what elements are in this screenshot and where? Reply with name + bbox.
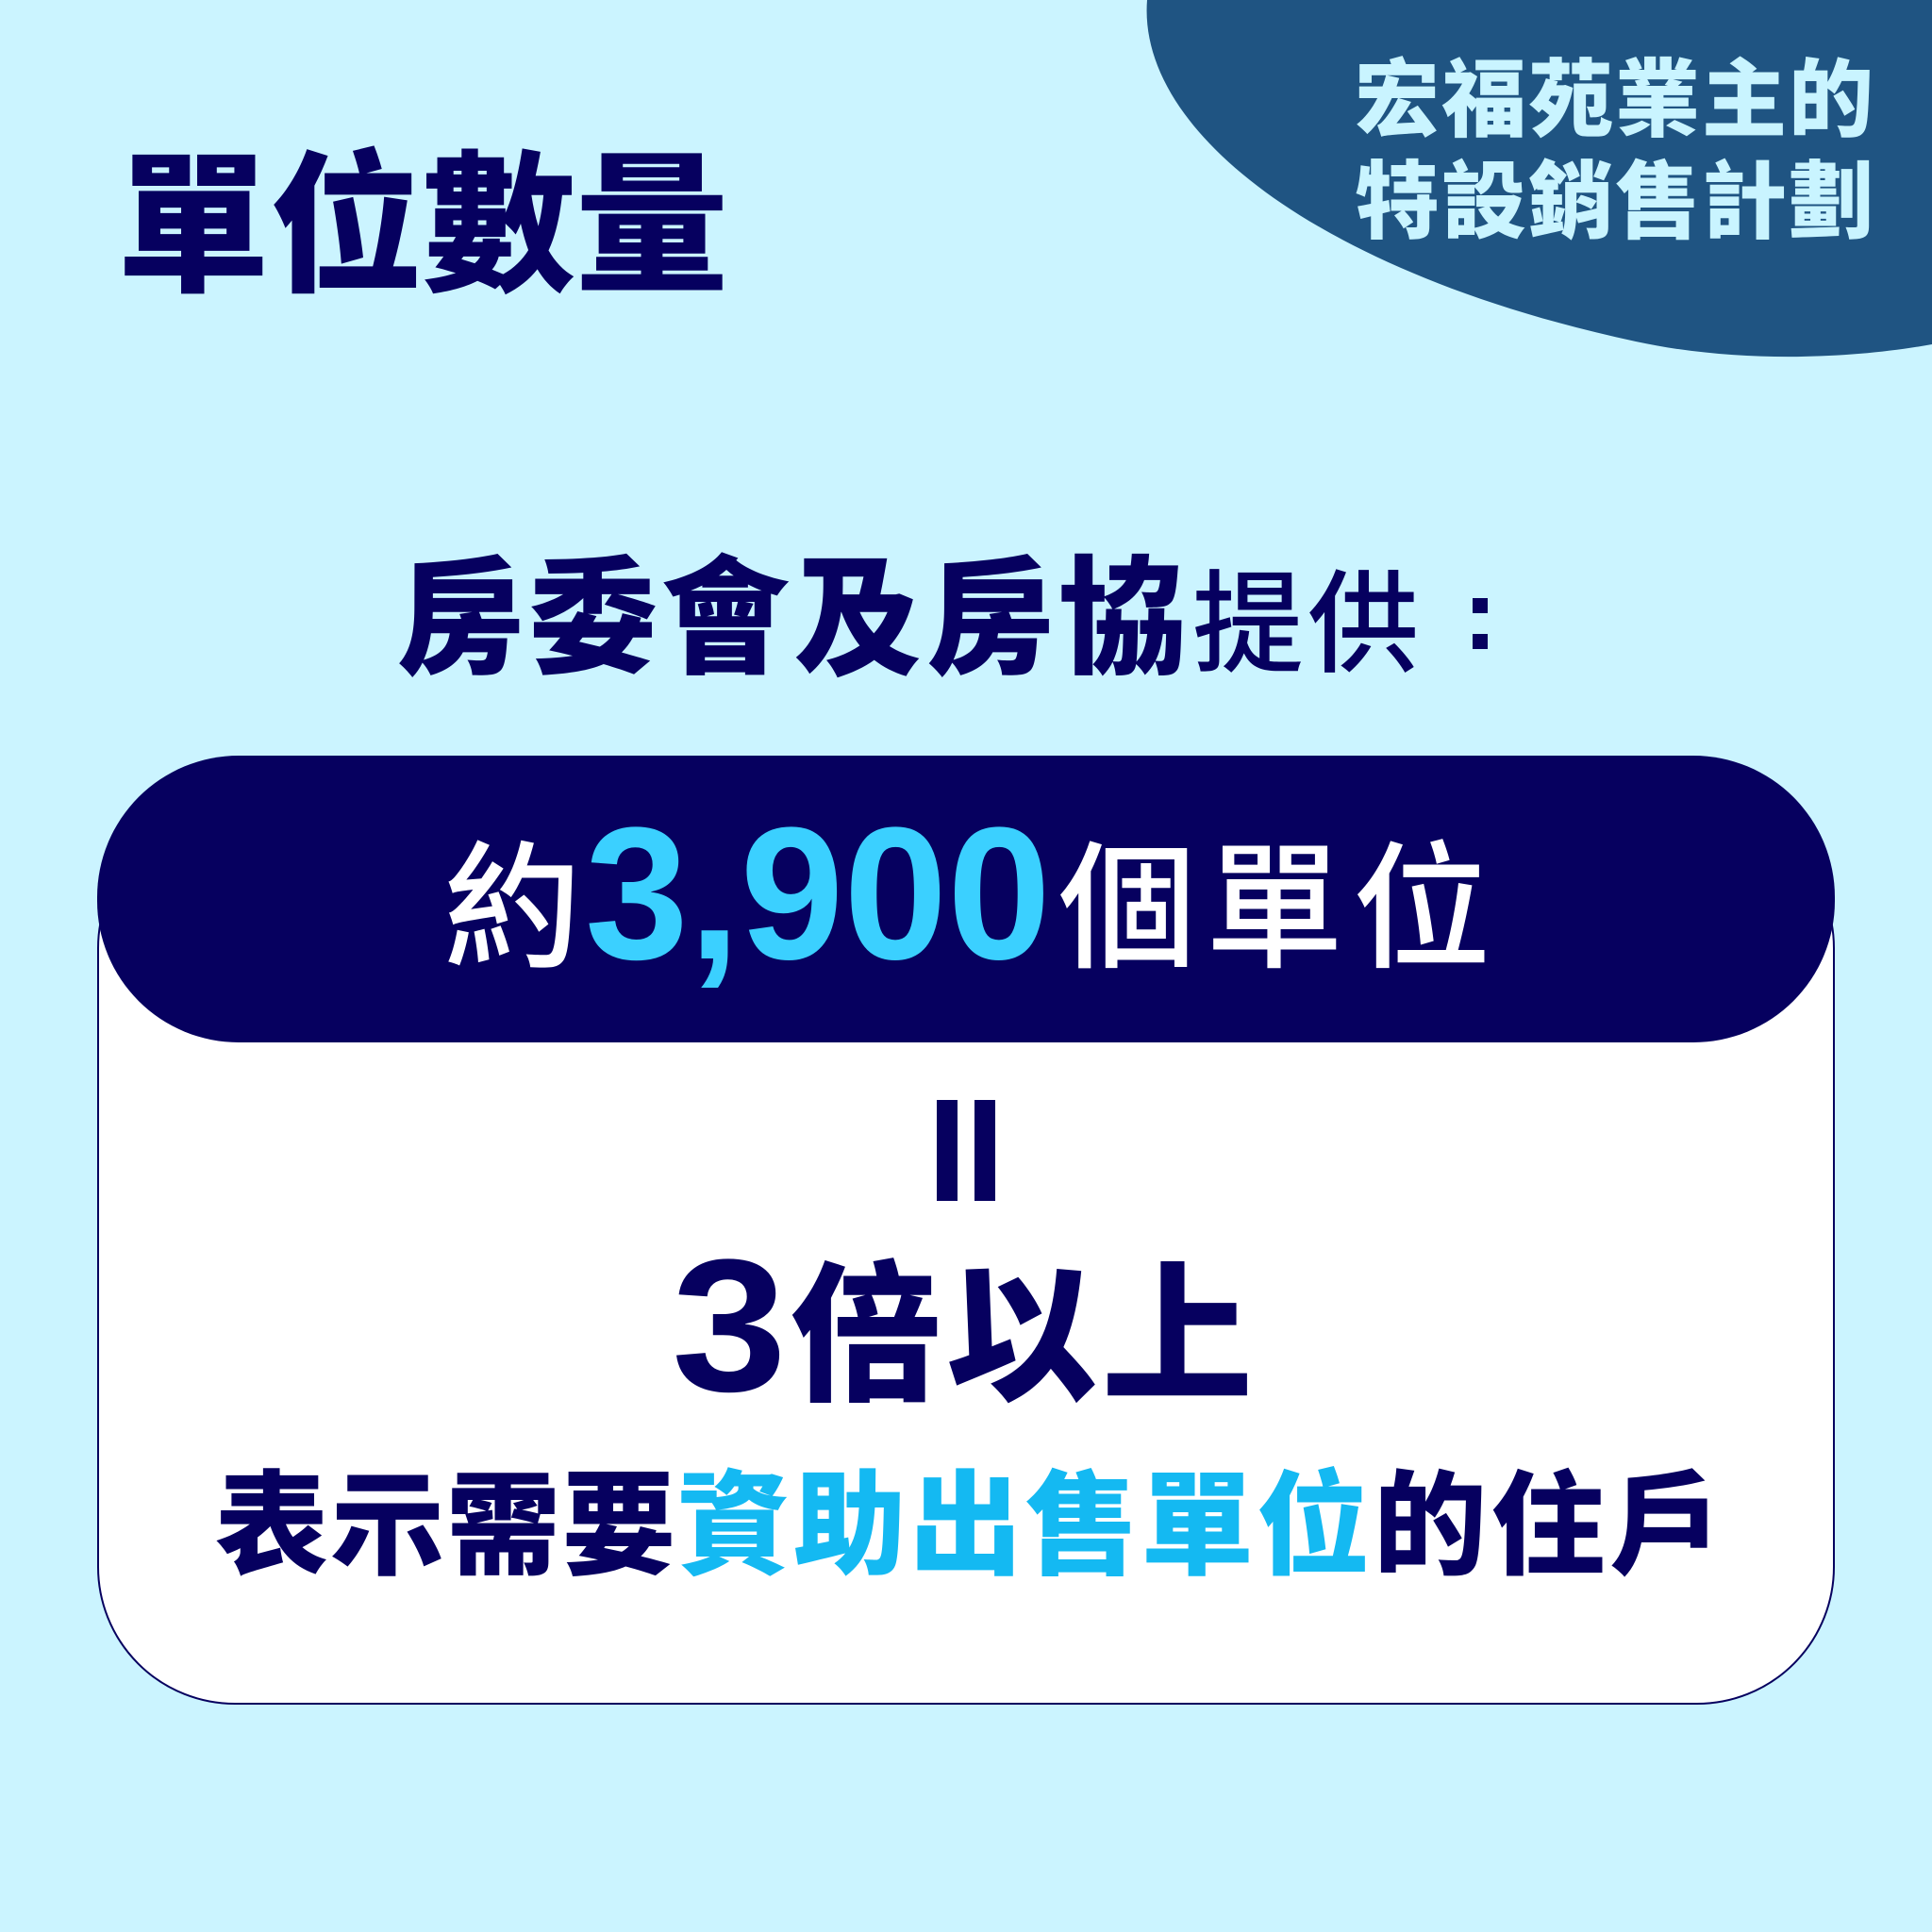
subheading: 提供	[1192, 534, 1419, 695]
big multiple: 3	[672, 1221, 787, 1431]
corner blob with series label	[1147, 0, 1932, 357]
conclusion line	[215, 1434, 1723, 1598]
header text: 個單位	[1058, 798, 1491, 997]
conclusion line: 的住戶	[1374, 1434, 1723, 1598]
series label: 特設銷售計劃	[1355, 133, 1874, 256]
card header	[97, 756, 1835, 1042]
subheading: 房委會及房協	[396, 515, 1187, 701]
equals sign	[937, 1100, 995, 1201]
header text: 3,900	[585, 789, 1051, 999]
conclusion line: 資助出售單位	[677, 1434, 1370, 1598]
colon	[1473, 598, 1488, 649]
big multiple: 倍以上	[791, 1214, 1253, 1433]
header text: 約	[443, 798, 581, 997]
series label: 宏福苑業主的	[1355, 31, 1874, 154]
series label	[1355, 31, 1874, 256]
title: 單位數量	[117, 102, 728, 324]
conclusion line: 表示需要	[215, 1434, 675, 1598]
card	[97, 756, 1835, 1704]
header text	[443, 789, 1491, 999]
